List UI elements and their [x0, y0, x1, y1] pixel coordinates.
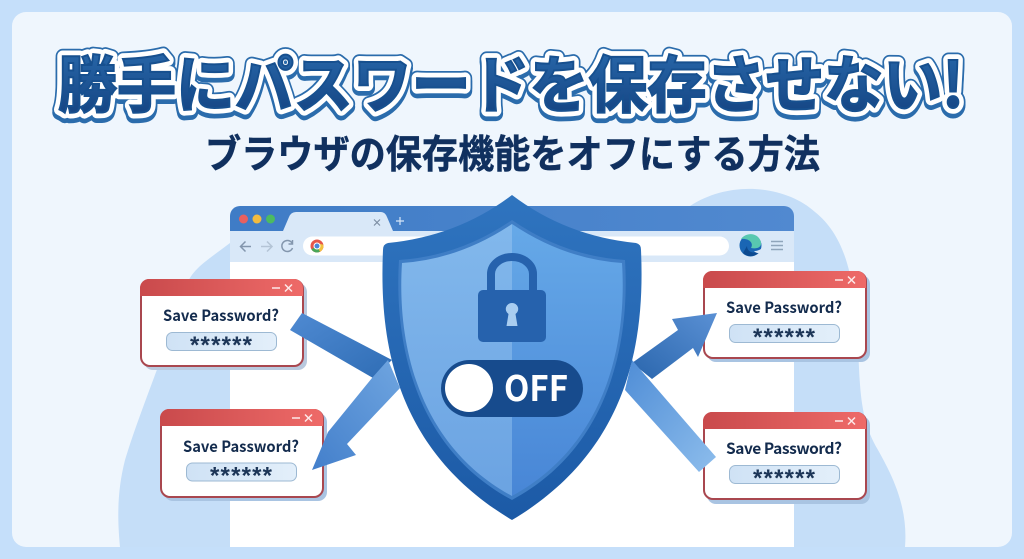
window control dots [239, 214, 275, 224]
icon: chrome logo [310, 240, 324, 253]
toggle switch off: OFF [504, 361, 568, 412]
dialog: bottom left: Save Password? [183, 435, 299, 457]
navigation icons [240, 240, 292, 252]
dialog: bottom right [703, 412, 870, 504]
browser toolbar [230, 231, 794, 262]
subtitle: ブラウザの保存機能をオフにする方法 [205, 124, 820, 180]
dialog: top left: Save Password? [163, 304, 279, 326]
icon: padlock [478, 257, 546, 342]
dialog: top left: ****** [190, 332, 253, 359]
arrow: top left to shield [290, 313, 392, 378]
menu icon [771, 242, 783, 250]
dialog: top right: Save Password? [726, 296, 842, 318]
title: 勝手にパスワードを保存させない! [58, 35, 964, 125]
title: 勝手にパスワードを保存させない! [58, 38, 964, 128]
shield inner left half [401, 224, 512, 496]
icon: edge logo [740, 234, 762, 256]
background blobs [118, 189, 905, 547]
shield inner right half [512, 224, 623, 496]
browser tab bar [230, 206, 794, 231]
dialog: top left [140, 279, 307, 370]
arrow: lower right from shield [625, 360, 716, 472]
toggle switch off [441, 360, 583, 417]
browser page area [230, 262, 794, 547]
new tab plus [396, 217, 404, 225]
shield outer rim [382, 195, 642, 520]
dialog: top right [703, 271, 870, 362]
arrow: to upper right dialog [632, 313, 717, 379]
browser window [230, 206, 794, 547]
arrow: to lower left dialog [312, 360, 400, 470]
dialog: bottom right: ****** [753, 465, 816, 492]
dialog: top right: ****** [753, 324, 816, 351]
active tab [283, 212, 393, 231]
shield inner edge [398, 220, 626, 500]
shield [382, 195, 642, 520]
dialog: bottom right: Save Password? [726, 437, 842, 459]
tab close icon [374, 220, 380, 226]
address bar [303, 236, 729, 256]
dialog: bottom left [160, 409, 327, 501]
title: 勝手にパスワードを保存させない! [58, 35, 964, 125]
dialog: bottom left: ****** [210, 462, 273, 490]
title: 勝手にパスワードを保存させない! [58, 35, 964, 125]
